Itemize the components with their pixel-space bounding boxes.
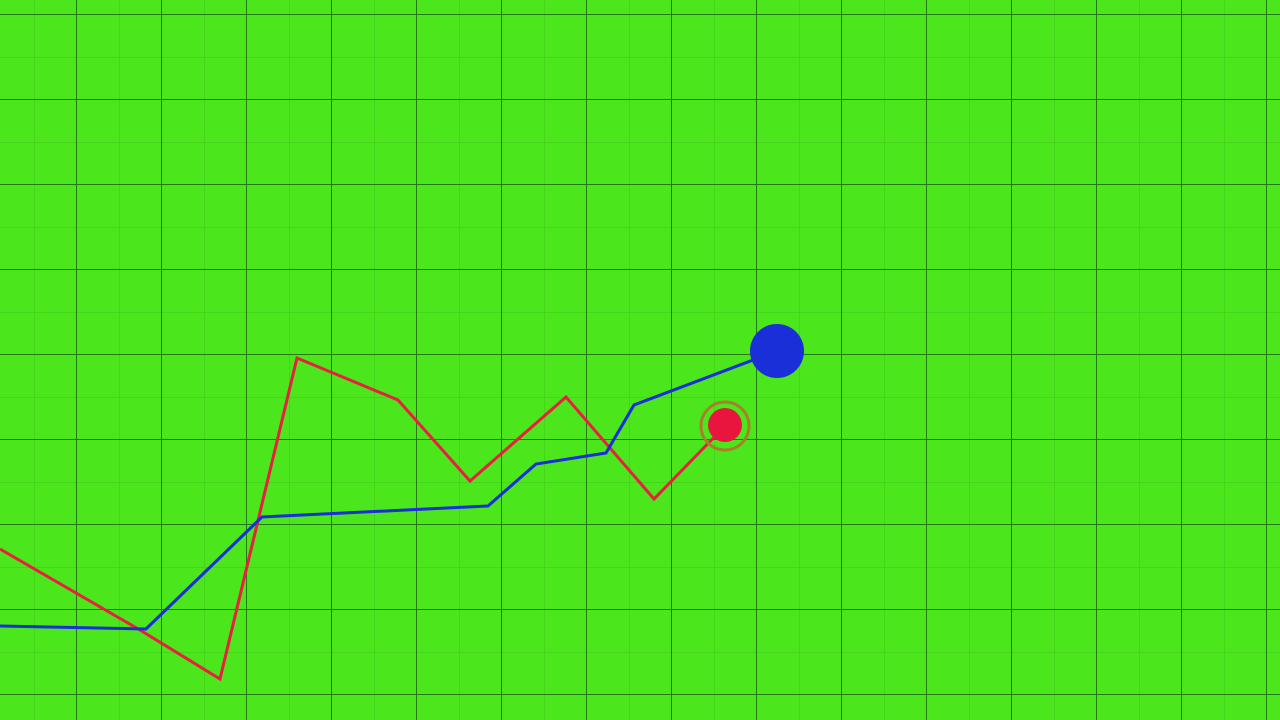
blue line series — [0, 324, 804, 629]
blue end marker — [750, 324, 804, 378]
red end marker — [701, 402, 749, 450]
red line series — [0, 358, 749, 679]
